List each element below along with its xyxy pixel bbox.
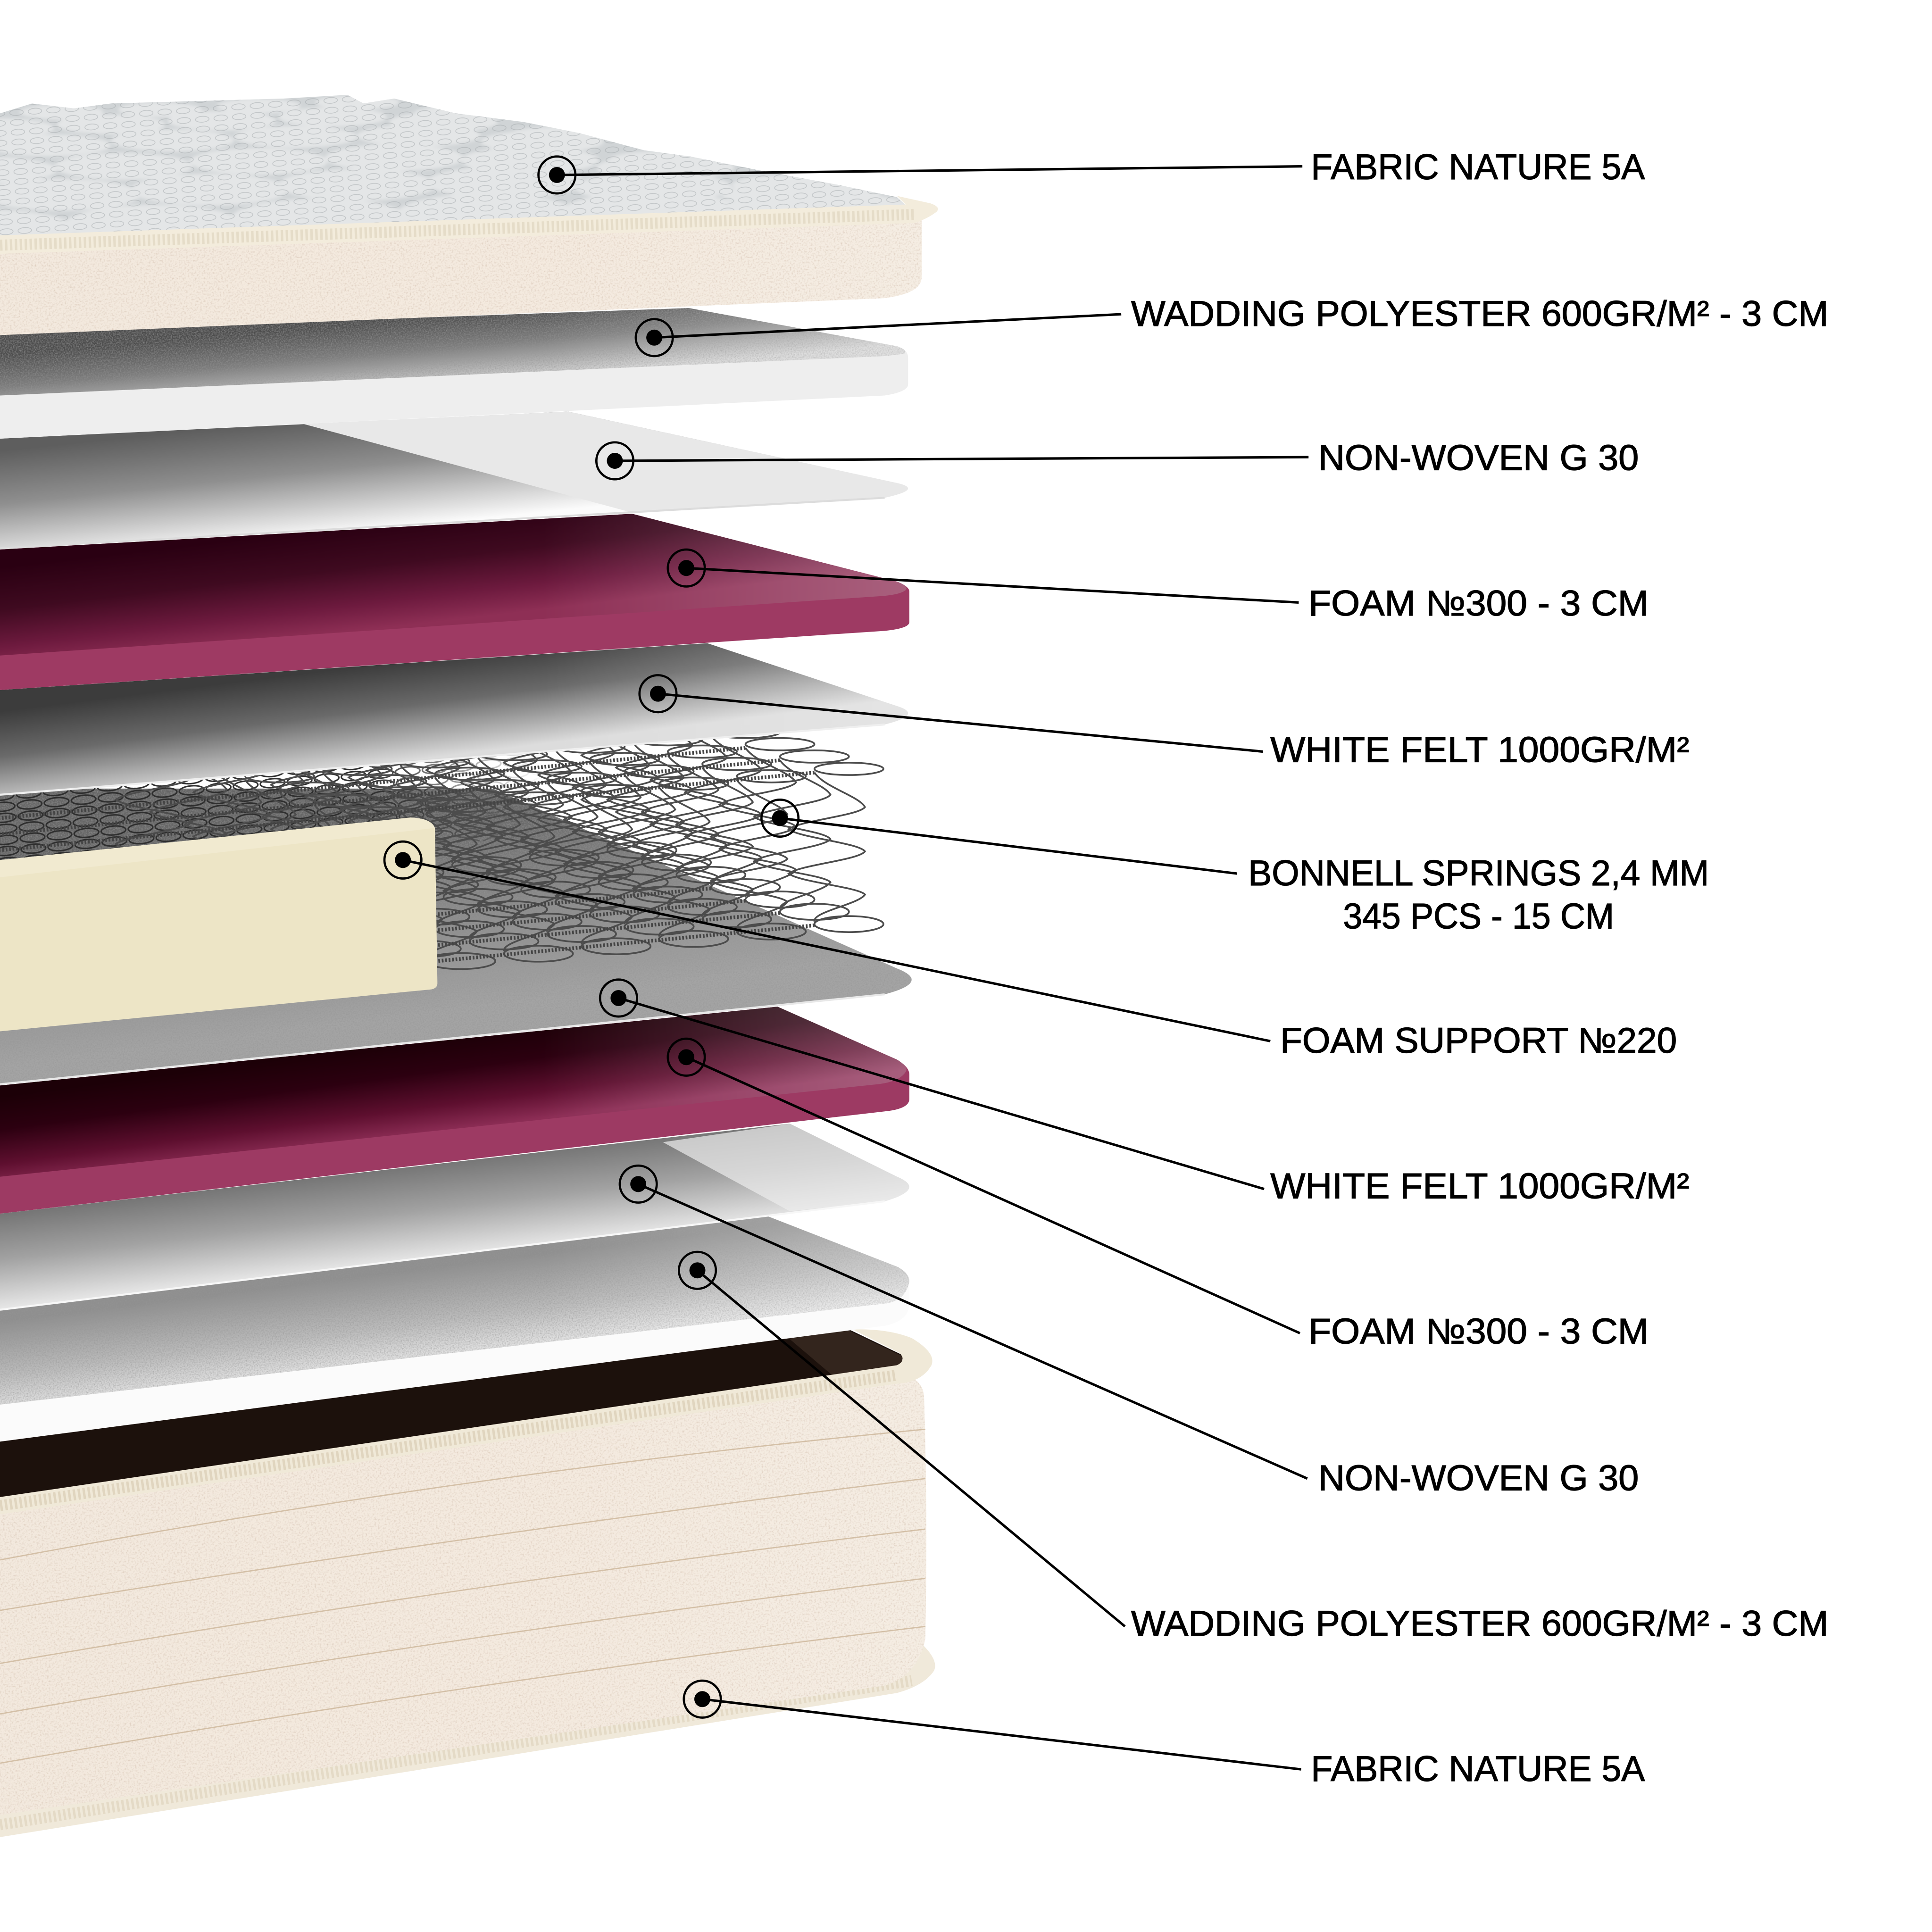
panel: white felt upper layer — [0, 643, 908, 795]
callout: non-woven top: NON-WOVEN G 30 — [1318, 438, 1639, 478]
callout: wadding polyester bottom — [679, 1252, 1829, 1644]
quilted side fabric — [0, 1373, 926, 1815]
callout: non-woven bottom — [620, 1166, 1639, 1499]
white edge — [0, 1201, 885, 1310]
panel: wadding polyester upper layer — [0, 308, 908, 439]
panel: bonnell springs — [0, 734, 884, 970]
interior brown corner — [789, 1330, 903, 1380]
callouts — [384, 147, 1829, 1789]
non-woven shaded surface — [0, 411, 908, 548]
panel: non-woven lower layer — [0, 1124, 909, 1310]
callout: foam 300 top: FOAM №300 - 3 CM — [1308, 583, 1649, 624]
individual springs — [116, 689, 883, 976]
bottom mattress base — [0, 1328, 935, 1837]
panel: wadding polyester lower layer — [0, 1210, 909, 1441]
callout: foam support — [384, 841, 1677, 1061]
translucent corner — [663, 1124, 909, 1211]
panel: white felt lower layer — [0, 789, 912, 1084]
felt white edge — [0, 994, 885, 1084]
callout: fabric nature bottom — [684, 1681, 1645, 1789]
callout: white felt bottom: WHITE FELT 1000GR/M² — [1270, 1166, 1689, 1206]
callout: foam 300 bottom: FOAM №300 - 3 CM — [1308, 1312, 1649, 1352]
callout: foam 300 bottom — [668, 1039, 1649, 1352]
felt edge — [0, 724, 885, 795]
felt textured surface — [0, 789, 912, 1084]
dense compressed coil zone — [0, 754, 535, 860]
side stitch lines — [0, 1429, 925, 1763]
callout: bonnell springs — [761, 799, 1709, 936]
block face — [0, 817, 437, 1031]
foam top surface — [0, 514, 907, 656]
callout: wadding polyester top: WADDING POLYESTER 600GR/M² - 3 CM — [1131, 294, 1829, 334]
wadding side — [0, 1210, 909, 1441]
callout: bonnell springs: BONNELL SPRINGS 2,4 MM — [1248, 853, 1709, 893]
callout: non-woven bottom: NON-WOVEN G 30 — [1318, 1458, 1639, 1499]
callout: wadding polyester top — [636, 294, 1829, 356]
bottom piping — [0, 1645, 935, 1837]
foam side — [0, 1007, 909, 1214]
callout: white felt top: WHITE FELT 1000GR/M² — [1270, 730, 1689, 770]
callout: fabric nature top — [539, 147, 1645, 193]
top piping — [0, 196, 938, 254]
callout: foam support: FOAM SUPPORT №220 — [1280, 1021, 1677, 1061]
callout: wadding polyester bottom: WADDING POLYESTER 600GR/M² - 3 CM — [1131, 1604, 1829, 1644]
quilted top surface — [0, 95, 905, 235]
non-woven light corner — [303, 411, 908, 513]
callout: fabric nature top: FABRIC NATURE 5A — [1311, 147, 1645, 187]
wadding top surface — [0, 1210, 909, 1405]
panel: foam 300 upper layer — [0, 514, 909, 690]
panel: foam 300 lower layer — [0, 1007, 909, 1214]
panel: foam support block — [0, 817, 437, 1031]
side fabric — [0, 212, 922, 335]
callout: foam 300 top — [668, 550, 1649, 624]
wadding top surface — [0, 308, 905, 396]
felt surface — [0, 643, 908, 795]
callout: fabric nature bottom: FABRIC NATURE 5A — [1311, 1749, 1645, 1789]
spring tie coils — [0, 748, 815, 961]
callout: bonnell springs: 345 PCS - 15 CM — [1343, 896, 1614, 936]
foam side — [0, 514, 909, 690]
top piping — [0, 1329, 933, 1514]
panel: non-woven upper layer — [0, 411, 908, 548]
panel: top mattress — [0, 95, 938, 335]
callout: white felt top — [640, 675, 1689, 770]
callout: non-woven top — [596, 438, 1639, 479]
block top edge — [0, 817, 435, 877]
wadding side — [0, 308, 908, 439]
foam top surface — [0, 1007, 907, 1177]
non-woven surface — [0, 1124, 909, 1310]
callout: white felt bottom — [600, 980, 1689, 1206]
dark interior — [0, 1328, 903, 1501]
edge — [0, 498, 885, 548]
